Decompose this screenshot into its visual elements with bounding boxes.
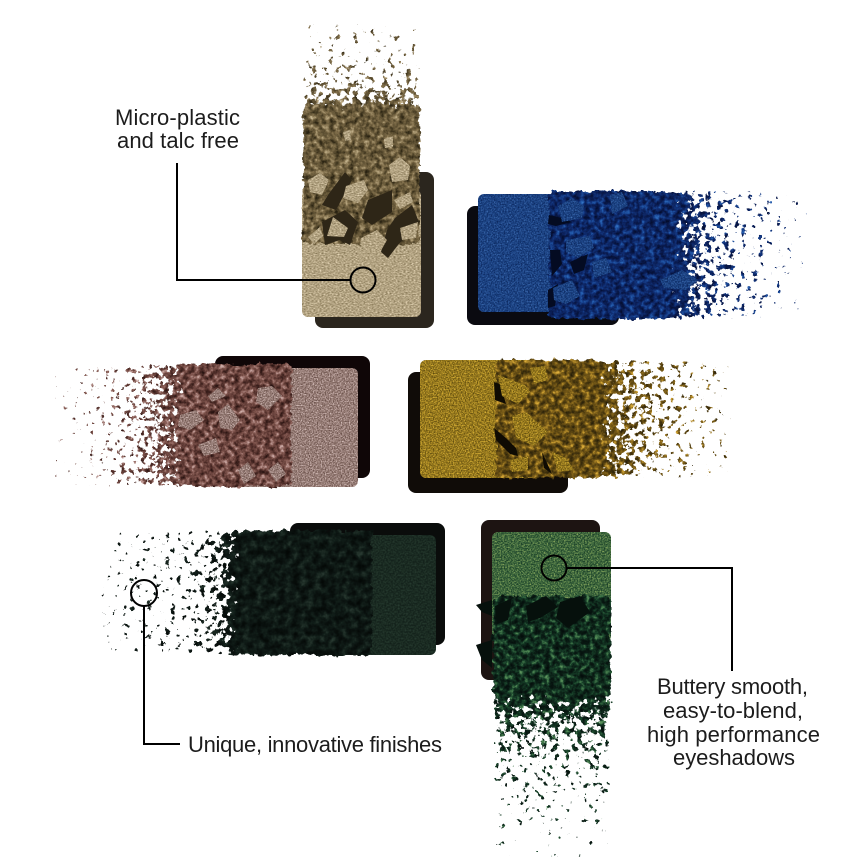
panel: beige eyeshadow xyxy=(302,20,434,328)
crumbled powder: beige xyxy=(303,20,420,244)
callout: buttery smooth: easy-to-blend, xyxy=(663,698,803,723)
crevices: blue xyxy=(548,215,694,308)
chunks: blue xyxy=(553,192,698,304)
chunks: pink xyxy=(178,386,286,484)
pan: dark green xyxy=(318,535,436,655)
panel: gold eyeshadow xyxy=(408,360,732,493)
callout: buttery smooth: eyeshadows xyxy=(673,745,795,770)
marker circle xyxy=(131,580,157,606)
shadow: beige pan xyxy=(315,172,434,328)
panel: blue eyeshadow xyxy=(467,191,807,325)
leader line xyxy=(567,568,732,671)
marker circle xyxy=(542,556,566,580)
crumbled powder: gold xyxy=(496,360,732,478)
marker circle xyxy=(350,268,376,292)
crevices: gold xyxy=(494,382,552,474)
panel: pink eyeshadow xyxy=(50,356,370,487)
panel: dark green eyeshadow xyxy=(100,523,445,655)
crevices: beige xyxy=(322,172,419,258)
shadow: green pan xyxy=(481,520,600,680)
shadow: pink pan xyxy=(215,356,370,478)
crumbled powder: blue xyxy=(549,191,807,319)
callout: buttery smooth: high performance xyxy=(647,722,820,747)
shadow: blue pan xyxy=(467,206,619,325)
pan: blue xyxy=(478,194,602,312)
shadow: dark green pan xyxy=(290,523,445,645)
crumbled powder: green xyxy=(493,596,611,862)
callout: buttery smooth xyxy=(542,556,820,770)
callout: unique, innovative finishes xyxy=(131,580,442,757)
chunks: beige xyxy=(308,130,418,256)
crumbled powder: pink xyxy=(50,364,291,487)
pan: green xyxy=(492,532,611,642)
panel: green eyeshadow xyxy=(476,520,611,862)
pan: pink xyxy=(240,368,358,487)
label text: Unique, innovative finishes xyxy=(188,732,442,757)
callout: micro-plastic and talc free xyxy=(115,105,376,292)
crumbled powder: dark green xyxy=(100,530,372,655)
chunks: gold xyxy=(498,366,574,472)
callout: micro-plastic and talc free: and talc free xyxy=(117,128,239,153)
label text: Buttery smooth, xyxy=(657,674,808,699)
shadow: gold pan xyxy=(408,372,568,493)
label text: Micro-plastic xyxy=(115,105,240,130)
leader line xyxy=(177,163,351,280)
pan: beige xyxy=(302,190,421,317)
leader line xyxy=(144,606,180,744)
pan: gold xyxy=(420,360,542,478)
crevices: green xyxy=(476,596,590,668)
